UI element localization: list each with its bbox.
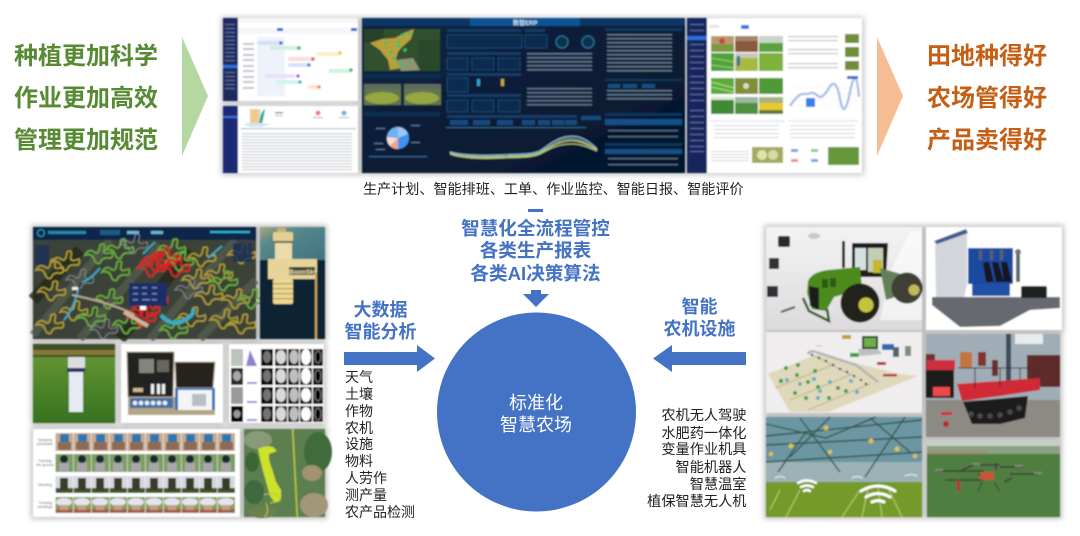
shadow backdrop: machinery images: [764, 225, 1064, 519]
pie chart: [374, 125, 420, 150]
headline: left benefits: 作业更加高效: [14, 85, 158, 112]
caption: top system functions: 生产计划、智能排班、工单、作业监控、智能日报、智能评价: [363, 181, 744, 197]
list: machinery types: 智能机器人: [676, 460, 746, 476]
heading: centre process block: [461, 209, 610, 284]
image: labour action recognition: the ground: [36, 463, 54, 467]
image: labour action recognition: pesticides: [37, 442, 53, 446]
image: irrigation schematic: [766, 332, 922, 413]
headline: right benefits: [927, 43, 1047, 154]
list: machinery types: 植保智慧无人机: [647, 494, 746, 510]
list: data sources: 设施: [345, 436, 373, 452]
arrow: down into circle: [523, 290, 549, 307]
heading: smart machinery: 农机设施: [664, 319, 736, 339]
panel: central ERP dark dashboard: 数智ERP: [513, 19, 537, 27]
panel: daily report dashboard: [223, 106, 358, 173]
headline: right benefits: 农场管得好: [927, 85, 1047, 112]
image: labour action recognition: Fanning: [38, 459, 52, 463]
list: data sources: 人劳作: [345, 470, 387, 486]
image: labour action recognition: Thinning: [38, 501, 52, 505]
panel: production schedule dashboard: [223, 18, 358, 101]
list: machinery types: [647, 408, 746, 510]
inspection records: [788, 34, 859, 70]
panel: field inspection dashboard: [687, 18, 862, 173]
list: machinery types: 变量作业机具: [661, 442, 746, 458]
image: GIS field map: [33, 227, 266, 339]
list: machinery types: 智慧温室: [690, 476, 746, 493]
image: labour action recognition: [33, 429, 240, 517]
circle: standardised smart farm: 智慧农场: [500, 415, 572, 435]
headline: left benefits: 管理更加规范: [14, 127, 158, 154]
circle: standardised smart farm: 标准化: [509, 393, 563, 413]
image: soil test kit: [121, 344, 223, 423]
headline: right benefits: 田地种得好: [927, 43, 1047, 70]
stat panels: [447, 35, 547, 112]
heading: centre process block: 各类生产报表: [480, 240, 592, 261]
heading: big data analysis: 智能分析: [344, 321, 416, 342]
photo grid one: [711, 36, 783, 71]
heading: smart machinery: [664, 296, 736, 339]
image: plant protection drone: [927, 440, 1060, 517]
image: labour action recognition: Spraying: [38, 438, 52, 442]
image: autonomous tractor: [766, 227, 922, 330]
line chart: [450, 136, 597, 158]
legend dots: [446, 127, 586, 128]
image: weather sensor: BoonSky: [289, 269, 318, 276]
headline: left benefits: [14, 43, 158, 154]
heading: big data analysis: 大数据: [354, 300, 408, 320]
tables: [710, 120, 858, 161]
image: fertigation machine: [926, 227, 1062, 330]
arrow: right orange chevron: [877, 37, 903, 156]
image: labour action recognition: seedlings: [37, 505, 53, 509]
image: satellite plot: [244, 429, 332, 518]
image: weather sensor: [260, 227, 325, 339]
arrow: left into circle: [653, 345, 746, 372]
list: machinery types: 水肥药一体化: [661, 426, 746, 442]
circle: standardised smart farm: [437, 312, 636, 512]
image: smart greenhouse: [766, 417, 922, 517]
list rows: [527, 34, 672, 105]
image: image analysis grid: [229, 344, 324, 423]
headline: left benefits: 种植更加科学: [14, 43, 158, 70]
list: data sources: 作物: [345, 403, 373, 419]
heading: centre process block: 各类AI决策算法: [470, 263, 601, 284]
heading: centre process block: 智慧化全流程管控: [461, 218, 610, 239]
list: data sources: 天气: [345, 369, 373, 385]
heading: big data analysis: [344, 300, 416, 342]
shadow backdrop: data images: [31, 225, 327, 519]
list: data sources: [345, 369, 415, 520]
headline: right benefits: 产品卖得好: [927, 127, 1047, 154]
list: machinery types: 农机无人驾驶: [661, 408, 746, 424]
list: data sources: 测产量: [345, 487, 387, 503]
photo grid two: [711, 78, 783, 114]
list: data sources: 物料: [345, 453, 373, 469]
list: data sources: 农机: [345, 420, 373, 436]
circular gauges: [556, 36, 594, 48]
list: data sources: 农产品检测: [345, 504, 415, 520]
image: labour action recognition: Weeding: [38, 483, 52, 487]
shadow backdrop: top dashboards: [221, 17, 864, 175]
image: tracked robot: [926, 334, 1060, 437]
arrow: left green chevron: [182, 37, 208, 156]
map thumbnail: [364, 29, 440, 71]
arrow: right into circle: [344, 345, 435, 372]
list: data sources: 土壤: [345, 386, 373, 402]
heading: smart machinery: 智能: [682, 296, 718, 317]
image: soil sensor on lawn: [33, 344, 115, 423]
line chart: [790, 76, 859, 109]
panel: central ERP dark dashboard: [362, 18, 685, 173]
video thumbnails: [364, 84, 441, 105]
